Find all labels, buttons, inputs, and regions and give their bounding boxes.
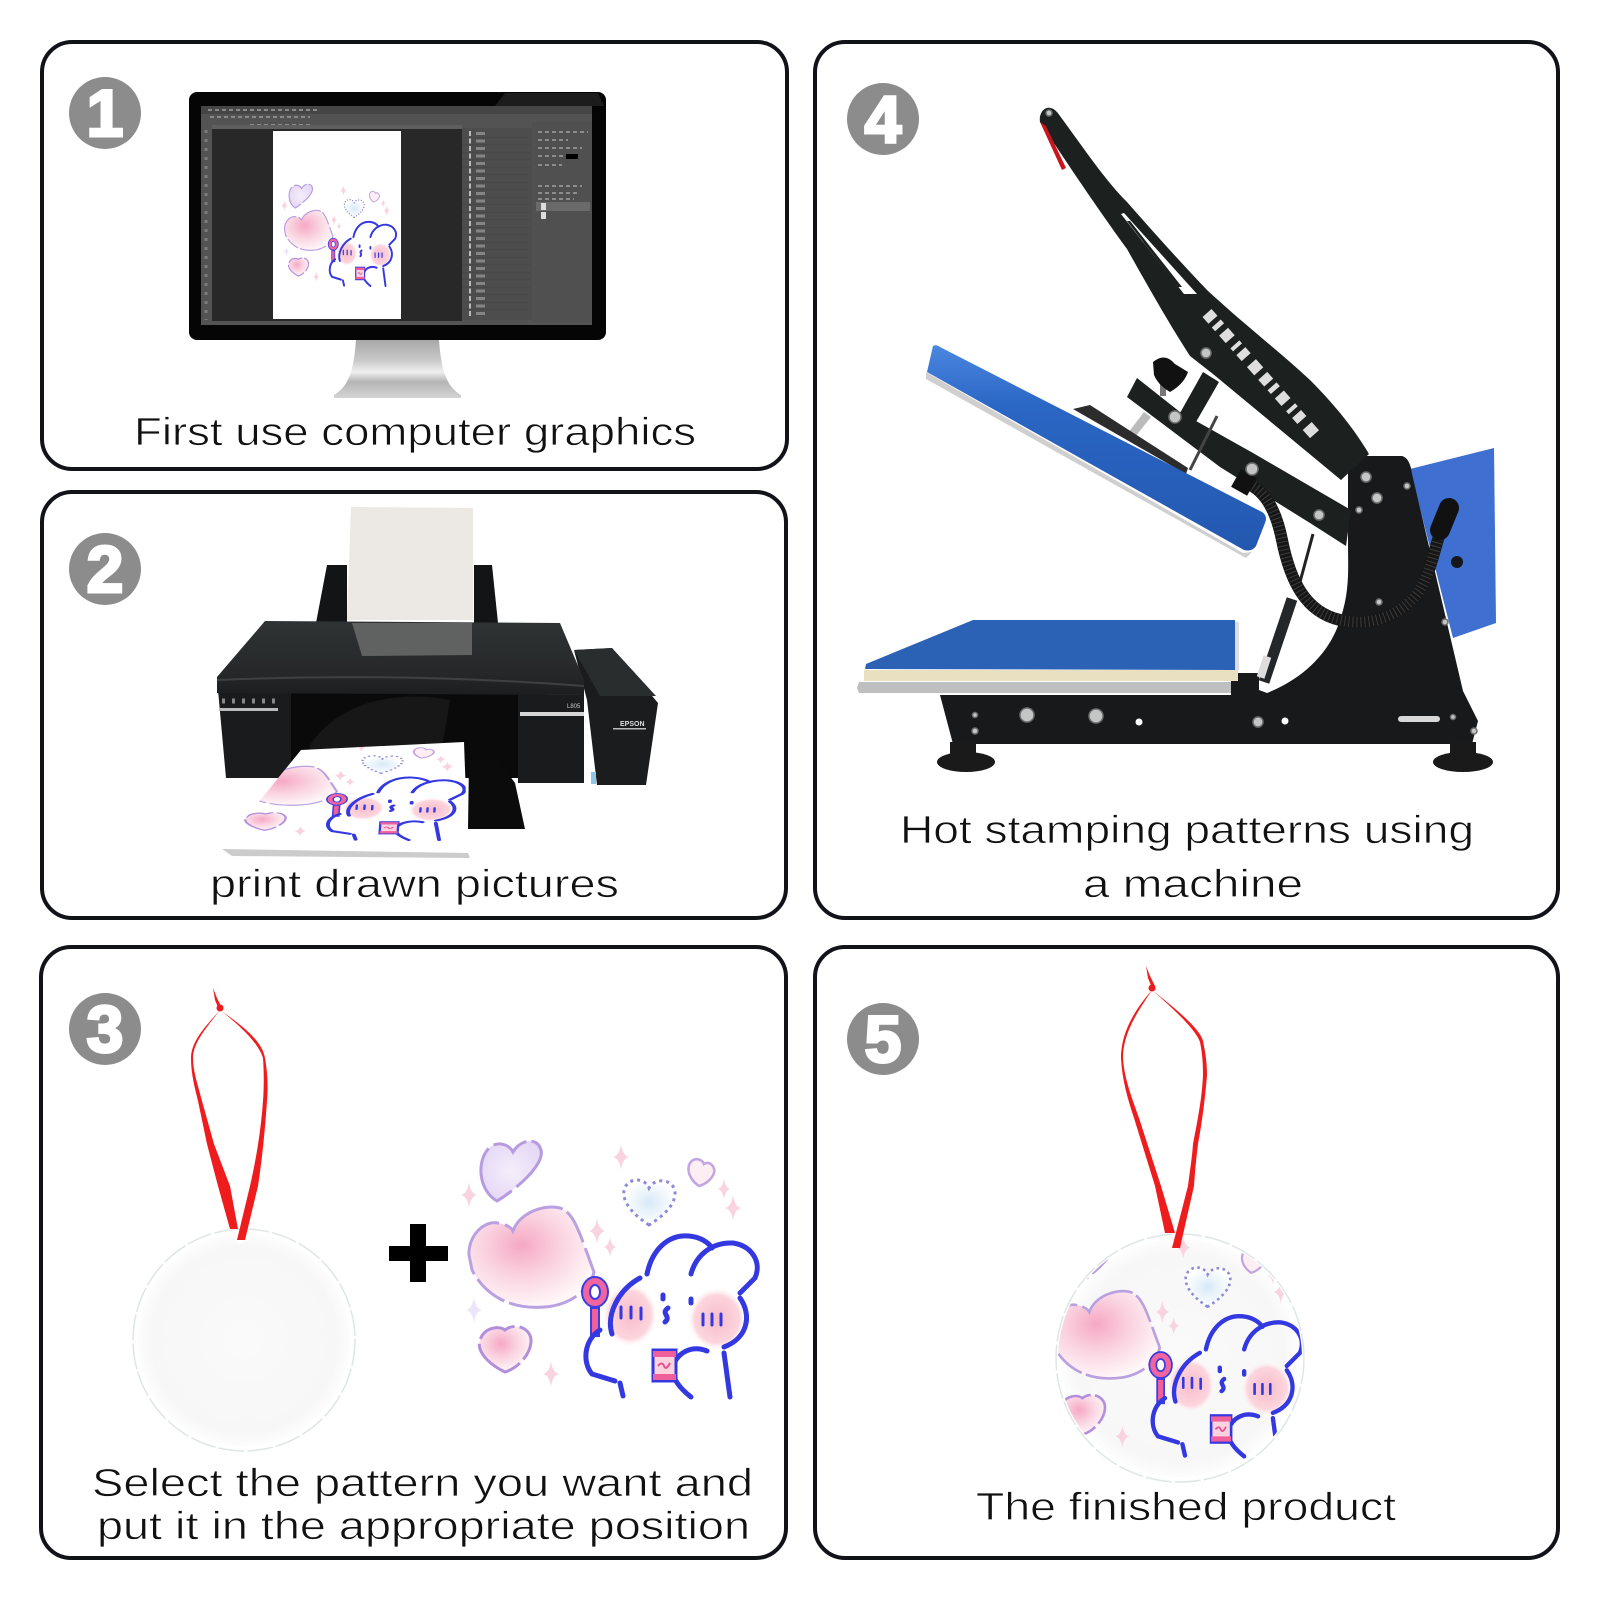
panel 2 card [42, 492, 786, 918]
handle cut-out lettering [1207, 313, 1317, 437]
caption 3 [92, 1462, 753, 1548]
panel 4: heat press [815, 42, 1558, 918]
step badge 4: 4 [865, 82, 902, 156]
adjustment bolt [1190, 416, 1217, 470]
step badge 5 [847, 1002, 919, 1076]
printed sheet with artwork [244, 742, 466, 841]
icon: red ribbon [191, 988, 268, 1240]
handle slot [1121, 213, 1197, 294]
caption 4: Hot stamping patterns using [900, 809, 1474, 852]
control strip [219, 708, 278, 711]
monitor stand [334, 340, 461, 398]
panel 5 card [815, 947, 1558, 1558]
brand label [613, 721, 646, 730]
ink tank [574, 648, 658, 785]
blank round ornament [133, 1229, 355, 1451]
step badge 3 [69, 992, 141, 1066]
panel 1: computer graphics [42, 42, 787, 469]
rear blue cover [1410, 448, 1496, 638]
icon: red ribbon [1121, 966, 1207, 1248]
panel 3: select pattern [41, 947, 786, 1558]
panel 4 card [815, 42, 1558, 918]
pattern artwork [461, 1141, 757, 1397]
caption 3: put it in the appropriate position [97, 1505, 750, 1548]
gas spring [1257, 534, 1313, 682]
icon: monitor with design software [189, 92, 606, 398]
step badge 1: 1 [87, 76, 123, 150]
bolts and holes [972, 110, 1477, 734]
model label: L805 [567, 704, 581, 710]
paper supports [316, 565, 498, 623]
caption 4: a machine [1083, 863, 1303, 906]
panel 5: finished product [815, 947, 1558, 1558]
panel 1 card [42, 42, 787, 469]
strut [1180, 372, 1219, 422]
step badge 5: 5 [865, 1002, 901, 1076]
step badge 1 [69, 76, 141, 150]
caption 2: print drawn pictures [210, 863, 619, 906]
step badge 2 [69, 532, 141, 606]
printed round ornament [1044, 1234, 1304, 1482]
frame [940, 456, 1478, 744]
printer front [218, 690, 584, 783]
software screen [201, 106, 592, 325]
lower platen [857, 620, 1239, 693]
printer lid [217, 621, 584, 695]
brand label: EPSON [620, 721, 645, 728]
paper shadow [222, 849, 470, 858]
mount plate [1073, 405, 1188, 474]
caption 1: First use computer graphics [134, 411, 696, 454]
handle red trim [1040, 122, 1066, 170]
caption 3: Select the pattern you want and [92, 1462, 753, 1505]
output tray [468, 760, 525, 829]
icon: printer [217, 507, 658, 858]
step badge 4 [847, 82, 919, 156]
caption 4 [900, 809, 1474, 906]
knob [1153, 357, 1188, 396]
upper platen [926, 345, 1266, 558]
icon: plus sign [389, 1224, 448, 1282]
panel 3 card [41, 947, 786, 1558]
monitor body [189, 92, 606, 340]
feet [937, 742, 1493, 772]
step badge 2: 2 [87, 532, 123, 606]
panel 2: printing [42, 492, 786, 918]
handle [1040, 108, 1369, 480]
icon: heat press machine [857, 108, 1496, 772]
arm [1127, 378, 1351, 546]
step badge 3: 3 [87, 992, 123, 1066]
hose [1236, 478, 1449, 622]
caption 5: The finished product [976, 1486, 1396, 1529]
input paper [347, 507, 473, 620]
stem [1128, 412, 1151, 437]
design page with artwork [273, 131, 401, 319]
